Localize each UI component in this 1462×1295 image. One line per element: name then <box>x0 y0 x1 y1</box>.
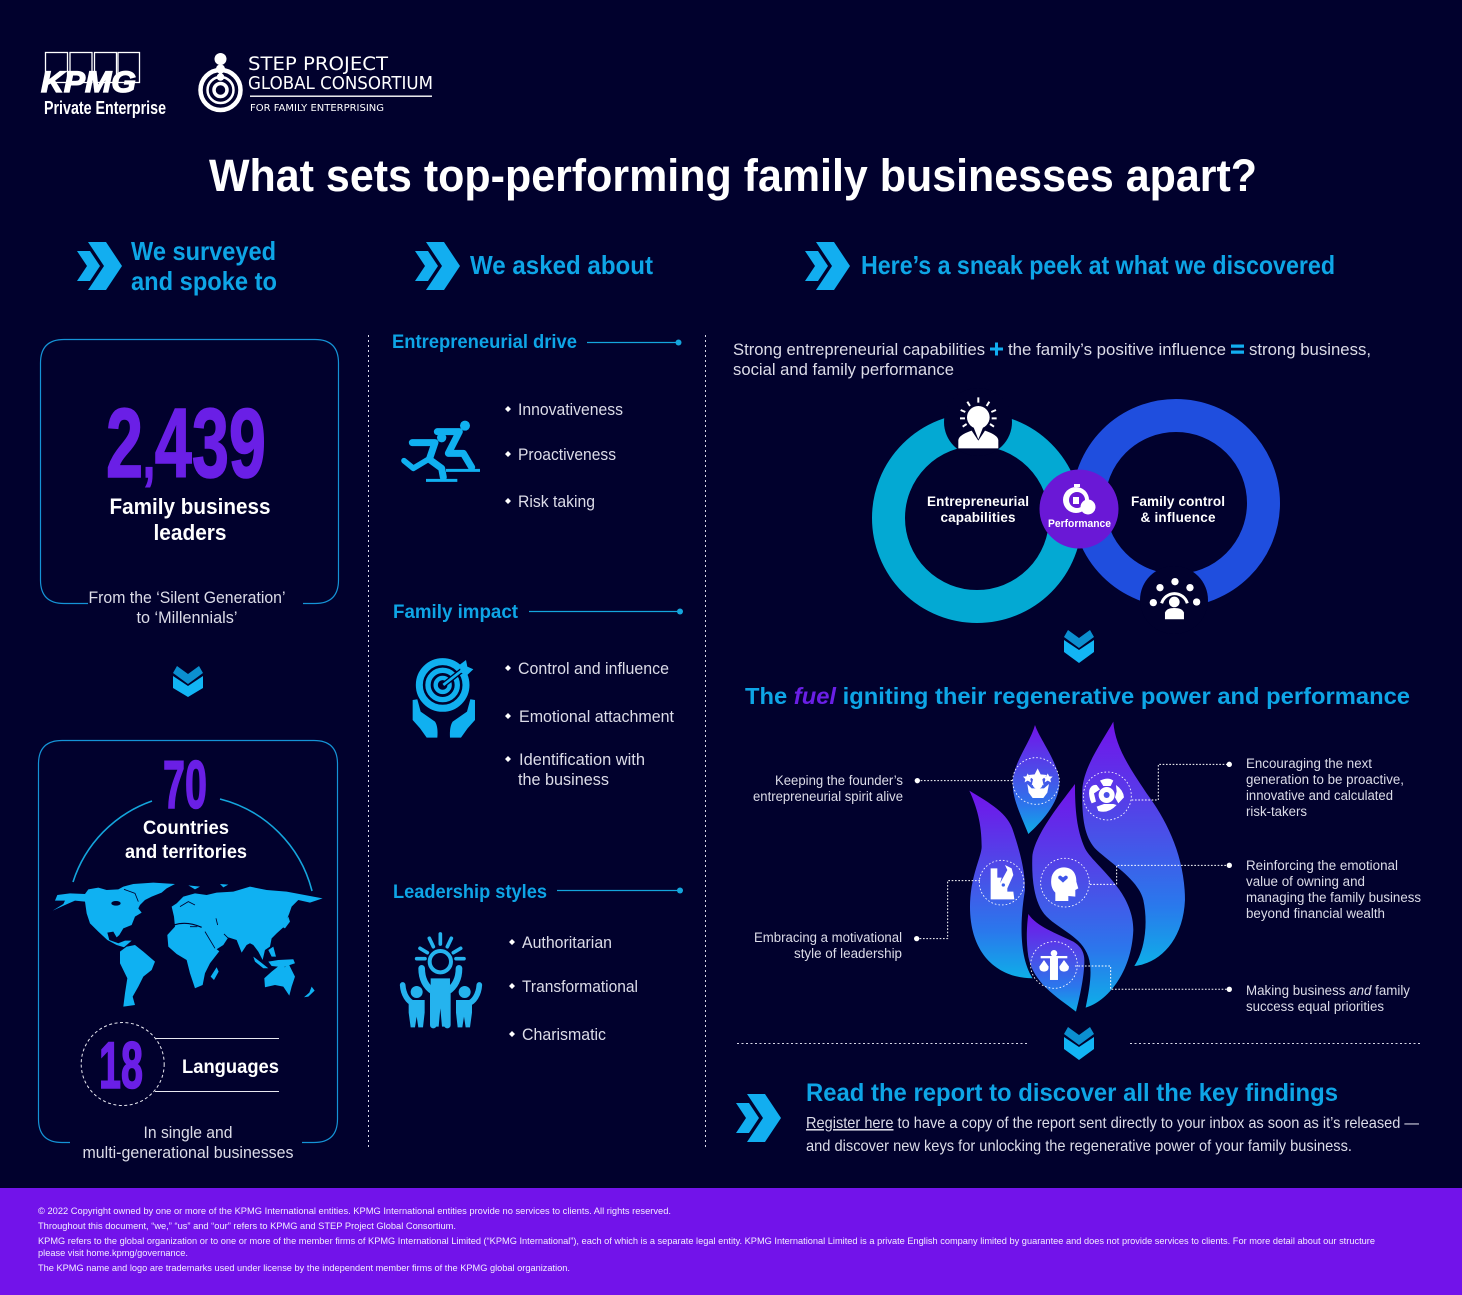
languages: Languages <box>182 1057 279 1078</box>
list: leadership styles: Authoritarian <box>522 934 612 952</box>
performance circle: Performance <box>1048 518 1111 530</box>
icon: people around person <box>1140 566 1208 634</box>
footer: © 2022 Copyright owned by one or more of the KPMG International entities. KPMG International entities provide no services to clients. All rights reserved. <box>38 1206 671 1217</box>
diagram: flames <box>753 722 1421 1014</box>
callout: motivational leadership <box>754 930 902 961</box>
flame: equal priorities <box>1027 914 1084 1012</box>
title: What sets top-performing family businesses apart? <box>209 150 1257 201</box>
languages <box>81 1022 279 1106</box>
footer: please visit home.kpmg/governance. <box>38 1248 188 1259</box>
list: leadership styles: Charismatic <box>522 1026 606 1044</box>
icon: head with heart <box>1051 867 1078 901</box>
diagram: interlocking rings <box>888 388 1264 634</box>
arrow: double chevron <box>736 1094 781 1142</box>
arrow: down chevron <box>1064 630 1094 663</box>
note: businesses: In single and <box>144 1124 232 1142</box>
arrow: double chevron <box>805 242 850 290</box>
callout: founder's spirit <box>753 773 903 804</box>
callout: next generation: generation to be proactive, <box>1246 772 1404 787</box>
callout: motivational leadership: style of leadership <box>794 946 902 961</box>
icon: hands around gear <box>1089 779 1124 812</box>
call to action: Read the report to discover all the key findings <box>806 1079 1338 1107</box>
dashed rings <box>979 758 1131 988</box>
world map <box>53 883 323 1007</box>
callout: equal priorities: Making business and family <box>1246 983 1410 998</box>
footer: The KPMG name and logo are trademarks used under license by the independent member firms of the KPMG global organization. <box>38 1263 570 1274</box>
column heading: sneak peek: Here’s a sneak peek at what we discovered <box>861 250 1335 280</box>
section: Entrepreneurial drive: Entrepreneurial drive <box>392 332 577 353</box>
icon: stopwatch and gear <box>1063 484 1096 514</box>
label: entrepreneurial capabilities: Entrepreneurial <box>927 494 1029 509</box>
icon: balance scale <box>1039 950 1069 980</box>
list: entrepreneurial items: Innovativeness <box>518 401 623 419</box>
callout: equal priorities <box>1246 983 1410 1014</box>
arrow: double chevron <box>77 242 122 290</box>
section: Leadership styles: Leadership styles <box>393 882 547 903</box>
icon: leader with lightbulb <box>403 934 479 1027</box>
column heading: We asked about: We asked about <box>470 250 653 280</box>
number: 2,439: 2,439 <box>106 388 266 498</box>
list: entrepreneurial items <box>505 401 623 511</box>
list: family impact items: Control and influence <box>518 660 669 678</box>
panel: family business leaders: leaders <box>154 520 226 545</box>
label: countries and territories: Countries <box>143 818 229 839</box>
callout: emotional value: value of owning and <box>1246 874 1365 889</box>
callout: emotional value: beyond financial wealth <box>1246 906 1385 921</box>
icon: person with lightbulb <box>944 388 1012 456</box>
text: discovery equation: the family’s positive influence <box>1008 341 1226 359</box>
callout: equal priorities: success equal priorities <box>1246 999 1384 1014</box>
text: discovery equation: social and family performance <box>733 361 954 379</box>
logo: STEP Project Global Consortium: STEP PROJECT <box>248 53 388 75</box>
flame: emotional value <box>1032 784 1133 1008</box>
logo: STEP Project Global Consortium <box>200 53 433 114</box>
column heading: We asked about <box>415 242 653 290</box>
arrow: down chevron <box>173 666 203 697</box>
note: generations: From the ‘Silent Generation’ <box>88 589 286 607</box>
list: family impact items <box>505 660 674 789</box>
call to action: Register here to have a copy of the report sent directly to your inbox as soon as it’s released — <box>806 1115 1419 1132</box>
arrow: down chevron <box>1064 1027 1094 1060</box>
diagram: interlocking rings: capabilities <box>940 510 1016 525</box>
callout: emotional value: Reinforcing the emotional <box>1246 858 1398 873</box>
list: leadership styles: Transformational <box>522 978 638 996</box>
label: family control and influence: Family control <box>1131 494 1225 509</box>
list: leadership styles <box>509 934 638 1044</box>
footer: KPMG refers to the global organization or to one or more of the member firms of KPMG International Limited (“KPMG International”), each of which is a separate legal entity. KPMG International Limited is a private English company limited by guarantee and does not provide services to clients. For more detail about our structure <box>38 1236 1375 1247</box>
section: Family impact: Family impact <box>393 602 519 623</box>
panel: family business leaders: to ‘Millennials’ <box>136 609 238 627</box>
dots <box>914 762 1232 992</box>
flame: motivational leadership <box>969 791 1033 978</box>
panel: countries and languages: multi-generational businesses <box>82 1144 294 1162</box>
panel: countries and languages: and territories <box>125 842 247 863</box>
diagram: interlocking rings: & influence <box>1140 510 1216 525</box>
logo: STEP Project Global Consortium: GLOBAL CONSORTIUM <box>248 73 433 94</box>
call to action: and discover new keys for unlocking the regenerative power of your family business. <box>806 1138 1352 1155</box>
panel: family business leaders <box>40 340 338 627</box>
list: entrepreneurial items: Proactiveness <box>518 446 616 464</box>
logo: KPMG Private Enterprise: KPMG <box>41 66 136 99</box>
callout: emotional value: managing the family business <box>1246 890 1421 905</box>
callout: founder's spirit: entrepreneurial spirit alive <box>753 789 903 804</box>
text: discovery equation: Strong entrepreneurial capabilities <box>733 341 985 359</box>
flame: spirit <box>1013 725 1059 834</box>
footer: Throughout this document, “we,” “us” and “our” refers to KPMG and STEP Project Global Consortium. <box>38 1221 456 1232</box>
arc over globe <box>73 799 312 891</box>
column heading: We surveyed and spoke to: and spoke to <box>131 266 277 296</box>
heading: the fuel: The fuel igniting their regenerative power and performance <box>745 683 1410 709</box>
callout: founder's spirit: Keeping the founder’s <box>775 773 903 788</box>
section: Entrepreneurial drive <box>392 332 682 511</box>
icon: stars and hand <box>1023 768 1053 798</box>
callout: next generation: risk-takers <box>1246 804 1307 819</box>
performance circle <box>1040 470 1118 548</box>
footer <box>0 1188 1462 1295</box>
section: Leadership styles <box>393 882 683 1044</box>
logo: KPMG Private Enterprise <box>41 52 166 118</box>
callout: next generation: innovative and calculated <box>1246 788 1393 803</box>
logo: KPMG Private Enterprise: Private Enterprise <box>44 98 166 118</box>
flame: next generation <box>1082 722 1185 966</box>
icon: target in hands <box>413 660 475 738</box>
column heading: We surveyed and spoke to <box>77 236 277 296</box>
call to action <box>736 1079 1419 1155</box>
callout: emotional value <box>1246 858 1421 921</box>
number: 70: 70 <box>163 747 207 823</box>
label: family business leaders: Family business <box>110 494 270 519</box>
list: family impact items: the business <box>518 771 609 789</box>
callout: next generation: Encouraging the next <box>1246 756 1372 771</box>
logo: STEP Project Global Consortium: FOR FAMILY ENTERPRISING <box>250 103 384 114</box>
leader lines <box>917 764 1229 989</box>
icon: runners <box>404 421 480 480</box>
arrow: double chevron <box>415 242 460 290</box>
callout: next generation <box>1246 756 1404 819</box>
list: family impact items: Emotional attachment <box>519 708 674 726</box>
text: discovery equation: strong business, <box>1249 341 1371 359</box>
panel: countries and languages <box>38 740 338 1162</box>
callout: motivational leadership: Embracing a motivational <box>754 930 902 945</box>
text: discovery equation <box>733 341 1371 379</box>
column heading: sneak peek <box>805 242 1335 290</box>
section: Family impact <box>393 602 683 789</box>
column heading: We surveyed and spoke to: We surveyed <box>131 236 276 266</box>
languages: 18 <box>99 1028 143 1102</box>
list: entrepreneurial items: Risk taking <box>518 493 595 511</box>
list: family impact items: Identification with <box>519 751 645 769</box>
icon: figure with arm raised <box>991 865 1014 899</box>
